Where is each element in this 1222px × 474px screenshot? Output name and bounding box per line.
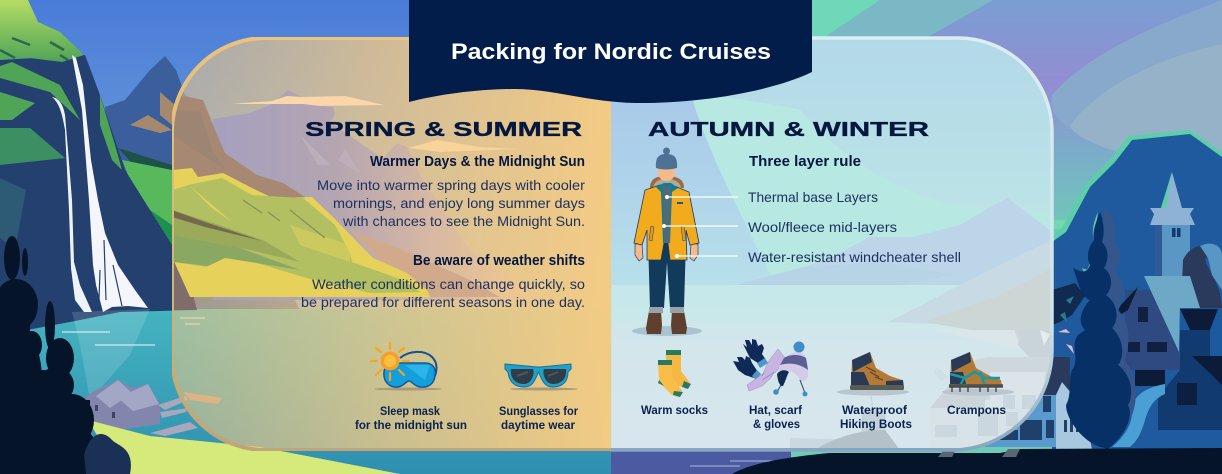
heading: autumn and winter: AUTUMN & WINTER (648, 119, 930, 141)
stream (1112, 384, 1165, 447)
darker band and trees (172, 210, 300, 262)
hood (650, 176, 684, 188)
icon: sunglasses (505, 364, 578, 390)
text block: warmer days (317, 154, 585, 229)
label: sunglasses (499, 404, 578, 432)
text block: weather shifts: Weather conditions can change quickly, so (312, 276, 585, 292)
water (0, 309, 611, 474)
icon: warm socks (658, 350, 691, 397)
panel: spring and summer (172, 37, 611, 451)
clouds (233, 96, 384, 106)
green cliff top (0, 0, 84, 62)
cliff (0, 55, 197, 335)
lower glove (733, 356, 758, 378)
label: crampons: Crampons (947, 403, 1006, 417)
pale mountains (802, 198, 1050, 285)
layer labels (748, 189, 961, 265)
trousers (648, 240, 686, 308)
head (658, 166, 675, 181)
label: waterproof hiking boots (840, 403, 912, 431)
text block: weather shifts: Be aware of weather shifts (413, 253, 585, 269)
ground (732, 448, 1222, 474)
label: sleep mask: Sleep mask (380, 404, 440, 418)
text block: warmer days: Warmer Days & the Midnight Sun (370, 154, 585, 170)
tan slope (350, 230, 500, 297)
boathouses (86, 380, 222, 436)
hands (635, 244, 643, 261)
label: hat, scarf and gloves: Hat, scarf (749, 403, 803, 417)
sea strip (611, 445, 791, 474)
layer labels: Wool/fleece mid-layers (748, 219, 897, 235)
blue peak (105, 56, 300, 310)
cliff rock (174, 262, 197, 310)
waterfalls (72, 55, 148, 312)
text block: weather shifts: be prepared for different seasons in one day. (301, 294, 585, 310)
text block: warmer days: mornings, and enjoy long summer days (333, 195, 585, 211)
callout lines (662, 196, 738, 258)
dark tree (0, 236, 131, 474)
frozen lake (612, 285, 1052, 450)
town buildings (985, 329, 1092, 450)
title banner (409, 0, 812, 103)
label: waterproof hiking boots: Hiking Boots (840, 417, 912, 431)
scene: summer fjord background (0, 0, 611, 474)
hills left of panel (118, 148, 172, 180)
mountain (1052, 134, 1222, 474)
text block: warmer days: Move into warmer spring days with cooler (317, 177, 585, 193)
left blue sky wedge (611, 100, 770, 285)
lime shore (88, 420, 400, 474)
mountain edge (1052, 130, 1222, 474)
panel: autumn and winter (611, 37, 1052, 451)
upper glove (743, 339, 766, 363)
church hall (1118, 244, 1222, 370)
headland (888, 241, 1050, 324)
aurora lobes (1051, 0, 1222, 160)
green hill slope (173, 178, 420, 293)
text: three layer rule: Three layer rule (749, 154, 861, 170)
jacket (634, 185, 699, 260)
heading: spring and summer: SPRING & SUMMER (305, 119, 583, 141)
icon: hiking boots (837, 352, 909, 396)
label: sleep mask (355, 404, 467, 432)
water glints (62, 318, 205, 345)
label: sleep mask: for the midnight sun (355, 418, 467, 432)
label: warm socks: Warm socks (641, 403, 708, 417)
brown mountain (174, 96, 306, 198)
yellow hill (172, 168, 430, 297)
large fir tree (1066, 208, 1136, 456)
title banner: Packing for Nordic Cruises (451, 39, 771, 64)
label: waterproof hiking boots: Waterproof (842, 403, 908, 417)
icon: crampons (942, 352, 1014, 396)
hat (778, 352, 808, 381)
label: sunglasses: Sunglasses for (499, 404, 578, 418)
text block: warmer days: with chances to see the Midnight Sun. (342, 213, 585, 229)
left dark hill (1052, 283, 1085, 325)
green horizon (1052, 220, 1072, 229)
label: sunglasses: daytime wear (501, 418, 575, 432)
teal aurora sweep (693, 97, 850, 261)
scarf (747, 349, 786, 391)
icon: hat, scarf and gloves (733, 339, 808, 396)
label: hat, scarf and gloves (749, 403, 803, 431)
inner lavender mountain (172, 90, 540, 310)
scene: aurora night background (611, 0, 1222, 474)
ghost town (1018, 339, 1050, 357)
panel border right (611, 38, 1052, 450)
aurora diagonal bands (812, 0, 880, 37)
figure: person in layers (632, 148, 702, 336)
church spire (1150, 172, 1195, 277)
text block: weather shifts (301, 253, 585, 310)
label: hat, scarf and gloves: & gloves (753, 417, 800, 431)
icon: sleep mask and sun (371, 343, 442, 390)
lower house (1135, 309, 1222, 430)
boots (646, 311, 662, 334)
layer labels: Water-resistant windcheater shell (748, 249, 961, 265)
layer labels: Thermal base Layers (748, 189, 878, 205)
